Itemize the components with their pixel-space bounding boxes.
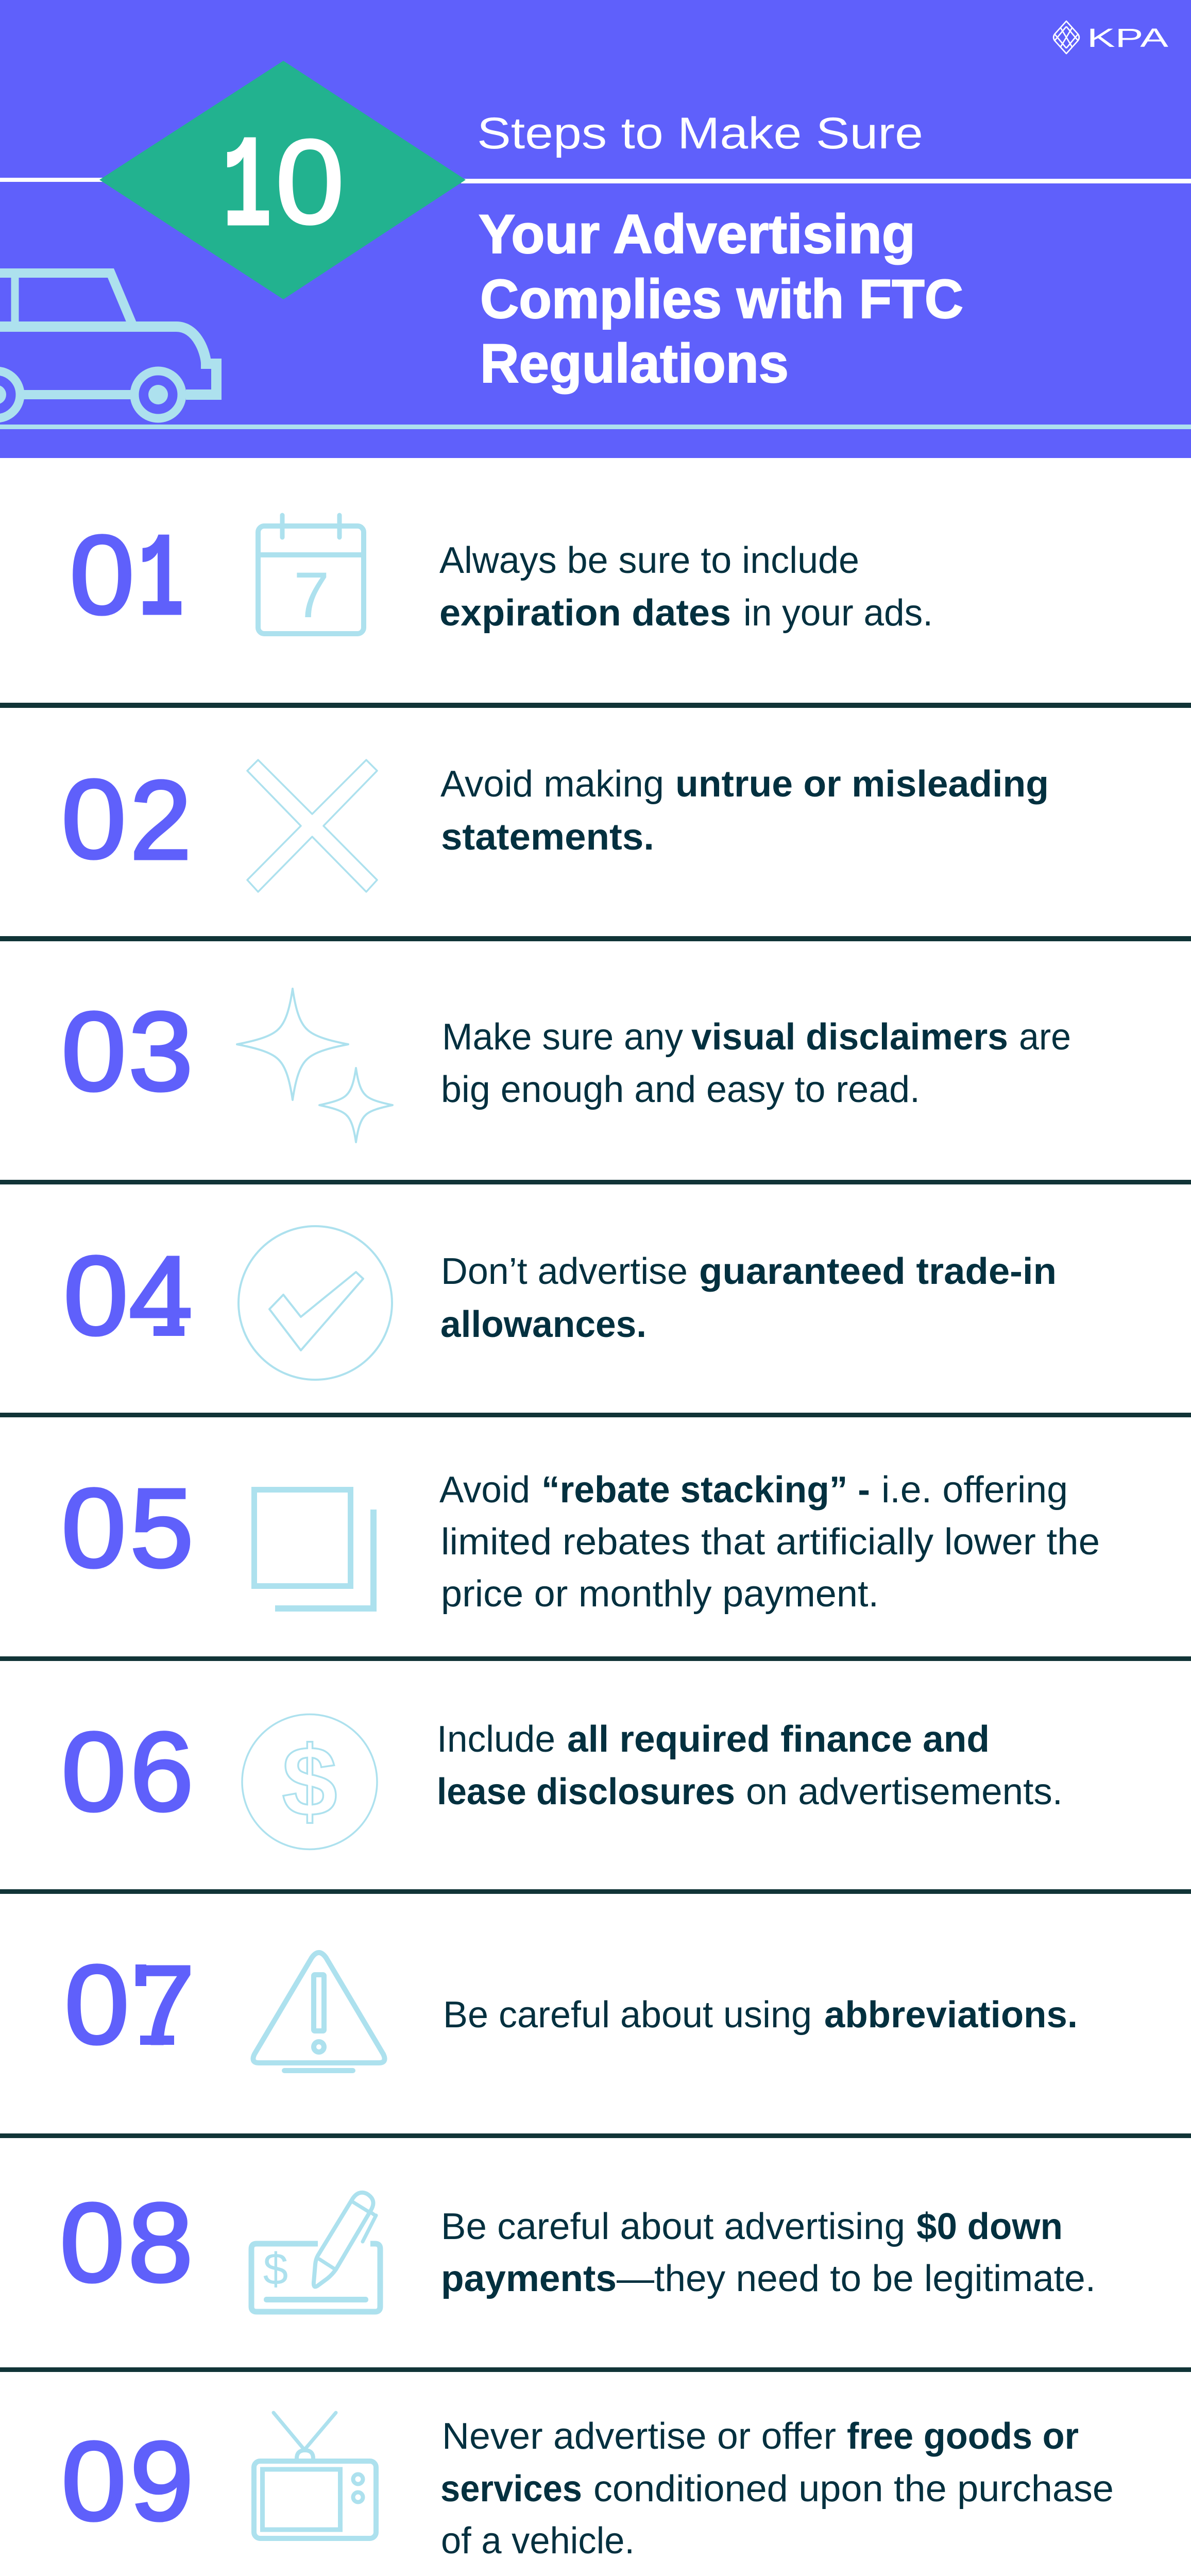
number 03: 3 [128, 989, 193, 1114]
text: visual disclaimers [691, 1016, 1008, 1058]
icon: dollar circle: $ [282, 1725, 337, 1837]
text: untrue or misleading [675, 764, 1049, 805]
number 05: 0 [61, 1466, 126, 1591]
text: Always be sure to include [439, 540, 859, 581]
text [437, 1719, 1063, 1812]
text: $0 down [916, 2206, 1063, 2247]
panel: step 03 [0, 941, 1191, 1180]
number 04: 4 [129, 1233, 193, 1359]
number 09 [61, 2419, 194, 2544]
text [441, 1016, 1071, 1110]
number 02: 0 [61, 757, 126, 882]
subtitle: Steps to Make Sure [477, 109, 923, 158]
text: on advertisements. [746, 1771, 1063, 1812]
text: price or monthly payment. [441, 1573, 879, 1615]
text: conditioned upon the purchase [593, 2468, 1114, 2510]
icon: calendar: 7 [294, 560, 330, 631]
icon: cheque and pen: $ [263, 2244, 288, 2294]
badge: green diamond with 10: 1 [222, 115, 272, 264]
number 06: 0 [61, 1709, 126, 1835]
panel: step 06 [0, 1661, 1191, 1889]
text: all required finance and [567, 1719, 990, 1760]
text: big enough and easy to read. [441, 1069, 920, 1110]
number 04 [63, 1233, 193, 1359]
text: in your ads. [743, 592, 933, 634]
text: services [440, 2468, 582, 2510]
number 01: 1 [138, 515, 184, 650]
title [479, 203, 963, 394]
text: Avoid [439, 1469, 530, 1511]
text: Include [437, 1719, 555, 1760]
text [440, 764, 1049, 858]
number 08: 8 [128, 2180, 193, 2306]
logo: KPA small: KPA [1087, 23, 1168, 53]
text: limited rebates that artificially lower the [441, 1521, 1100, 1563]
panel: step 08 [0, 2138, 1191, 2367]
icon: X [247, 760, 377, 892]
panel: step 05 [0, 1417, 1191, 1656]
text [439, 1469, 1100, 1615]
number 05: 5 [130, 1466, 194, 1591]
text: Be careful about advertising [441, 2206, 905, 2247]
text: of a vehicle. [441, 2520, 635, 2562]
icon: dollar circle [242, 1715, 377, 1850]
icon: warning triangle [253, 1953, 385, 2073]
text: —they need to be legitimate. [617, 2258, 1096, 2299]
text: are [1019, 1016, 1071, 1058]
logo: KPA small [1053, 21, 1168, 54]
text: abbreviations. [824, 1994, 1078, 2036]
text: Make sure any [442, 1016, 683, 1058]
text: i.e. offering [881, 1469, 1068, 1511]
icon: cheque and pen [251, 2193, 380, 2312]
number 01: 0 [70, 513, 134, 638]
number 09: 0 [61, 2419, 126, 2544]
text [440, 1251, 1057, 1345]
text: allowances. [440, 1304, 646, 1345]
panel: header [0, 0, 1191, 458]
number 08 [60, 2180, 193, 2306]
number 05 [61, 1466, 194, 1591]
icon: television [254, 2413, 376, 2538]
number 04: 0 [63, 1233, 128, 1359]
text: Avoid making [440, 764, 664, 805]
badge: green diamond with 10: 0 [276, 115, 344, 249]
title: Your Advertising [479, 203, 915, 265]
title: Regulations [480, 332, 789, 394]
panel: step 09 [0, 2372, 1191, 2576]
icon: stacked squares [254, 1490, 373, 1608]
icon: car [0, 273, 216, 418]
number 06 [61, 1709, 194, 1835]
text: Don’t advertise [441, 1251, 688, 1292]
text [441, 2206, 1096, 2299]
badge: green diamond with 10 [99, 61, 466, 299]
panel: step 01 [0, 458, 1191, 703]
text [443, 1994, 1078, 2036]
title: Complies with FTC [480, 268, 963, 330]
text: statements. [441, 817, 654, 858]
icon: check circle [239, 1226, 392, 1380]
text: Be careful about using [443, 1994, 812, 2036]
number 02: 2 [130, 758, 192, 883]
number 06: 6 [130, 1709, 194, 1835]
number 09: 9 [130, 2419, 194, 2544]
text: guaranteed trade-in [699, 1251, 1057, 1292]
number 08: 0 [60, 2180, 125, 2306]
icon: sparkles [237, 989, 393, 1142]
text [439, 540, 933, 634]
text: expiration dates [439, 592, 731, 634]
text: free goods or [847, 2416, 1079, 2457]
text: lease disclosures [437, 1771, 735, 1812]
text: “rebate stacking” - [541, 1469, 870, 1511]
number 07 [64, 1942, 195, 2068]
number 02 [61, 757, 192, 883]
number 07: 7 [132, 1943, 195, 2068]
number 03: 0 [61, 989, 126, 1114]
icon: calendar [258, 515, 364, 634]
number 07: 0 [64, 1942, 129, 2067]
number 03 [61, 989, 193, 1114]
number 01 [70, 513, 184, 650]
panel: step 02 [0, 708, 1191, 936]
panel: step 07 [0, 1894, 1191, 2133]
text: Never advertise or offer [442, 2416, 836, 2457]
text: payments [441, 2258, 617, 2299]
panel: step 04 [0, 1184, 1191, 1413]
text [440, 2416, 1114, 2562]
